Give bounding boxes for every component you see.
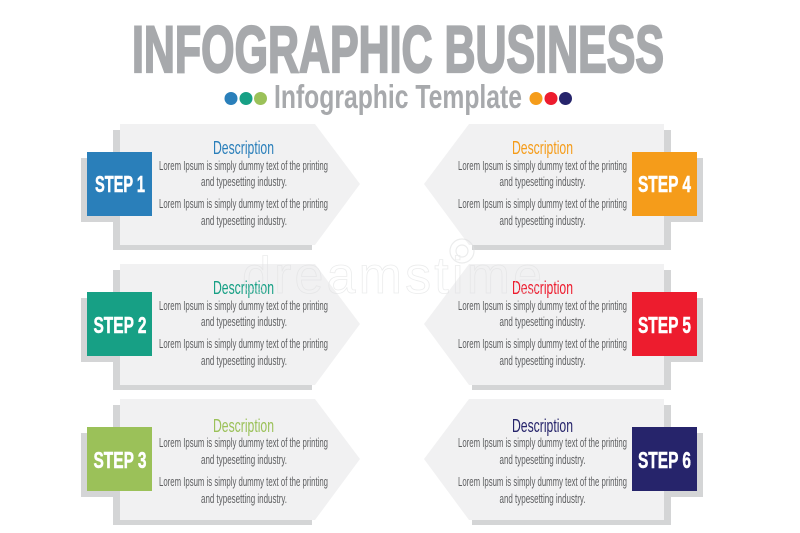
step 2 body text [159, 299, 328, 368]
step 2 heading: Description [213, 278, 274, 298]
step 5 heading: Description [512, 278, 573, 298]
step 2 label: STEP 2 [94, 312, 146, 338]
step 1 body text: and typesetting industry. [201, 175, 287, 189]
step 3 body text: Lorem Ipsum is simply dummy text of the printing [159, 475, 328, 489]
step 4 label: STEP 4 [638, 171, 691, 197]
step 3 label: STEP 3 [94, 447, 146, 473]
step 1 body text: and typesetting industry. [201, 214, 287, 228]
step 5 body text [458, 299, 627, 368]
step 1 body text [159, 159, 328, 228]
step 4 body text [458, 159, 627, 228]
panel: step 2 [81, 264, 360, 390]
step 5 label: STEP 5 [638, 312, 691, 338]
step 4 heading: Description [512, 138, 573, 158]
panel: step 6 [424, 399, 703, 525]
step 1 label: STEP 1 [95, 171, 145, 197]
step 5 body text: Lorem Ipsum is simply dummy text of the printing [458, 337, 627, 351]
subtitle: Infographic Template [274, 78, 522, 115]
step 3 heading: Description [213, 416, 274, 436]
step 6 label: STEP 6 [638, 447, 691, 473]
step 3 body text [159, 436, 328, 506]
step 1 heading: Description [213, 138, 274, 158]
step 4 body text: Lorem Ipsum is simply dummy text of the printing [458, 197, 627, 211]
step 5 body text: Lorem Ipsum is simply dummy text of the printing [458, 299, 627, 313]
step 3 body text: Lorem Ipsum is simply dummy text of the printing [159, 436, 328, 450]
legend dots: right [530, 92, 572, 105]
panel: step 3 [81, 399, 360, 525]
step 3 body text: and typesetting industry. [201, 453, 287, 467]
step 1 body text: Lorem Ipsum is simply dummy text of the printing [159, 159, 328, 173]
step 4 body text: and typesetting industry. [500, 175, 586, 189]
step 6 heading: Description [512, 416, 573, 436]
step 6 body text [458, 436, 627, 506]
watermark: dreamstime [242, 247, 542, 305]
step 2 body text: and typesetting industry. [201, 315, 287, 329]
panel: step 1 [81, 124, 360, 250]
step 6 body text: and typesetting industry. [500, 492, 586, 506]
step 5 body text: and typesetting industry. [500, 315, 586, 329]
step 2 body text: Lorem Ipsum is simply dummy text of the printing [159, 337, 328, 351]
step 4 body text: Lorem Ipsum is simply dummy text of the printing [458, 159, 627, 173]
step 6 body text: Lorem Ipsum is simply dummy text of the printing [458, 436, 627, 450]
step 6 body text: Lorem Ipsum is simply dummy text of the printing [458, 475, 627, 489]
step 2 body text: and typesetting industry. [201, 354, 287, 368]
step 5 body text: and typesetting industry. [500, 354, 586, 368]
panel: step 5 [424, 264, 703, 390]
step 6 body text: and typesetting industry. [500, 453, 586, 467]
step 1 body text: Lorem Ipsum is simply dummy text of the printing [159, 197, 328, 211]
step 4 body text: and typesetting industry. [500, 214, 586, 228]
legend dots: left [224, 92, 267, 105]
panel: step 4 [424, 124, 703, 250]
step 2 body text: Lorem Ipsum is simply dummy text of the printing [159, 299, 328, 313]
step 3 body text: and typesetting industry. [201, 492, 287, 506]
